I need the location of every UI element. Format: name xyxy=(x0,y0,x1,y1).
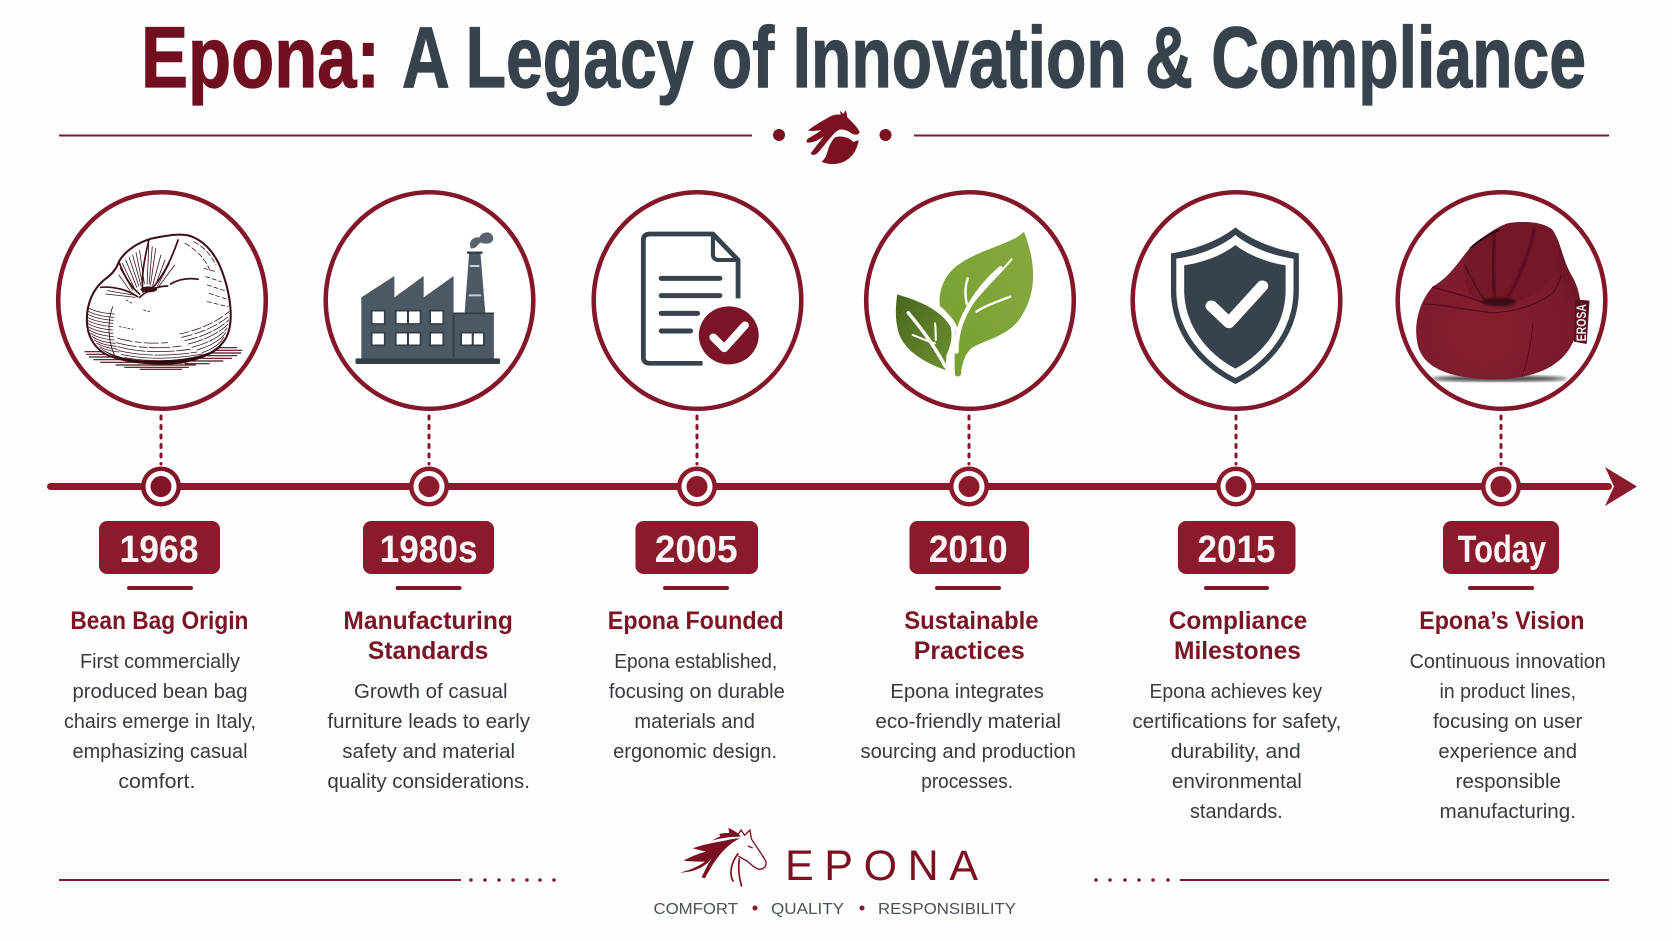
description: standards. xyxy=(1190,800,1283,823)
description xyxy=(609,650,785,763)
description: comfort. xyxy=(118,770,195,793)
connector xyxy=(1234,416,1238,464)
description: environmental xyxy=(1172,770,1302,793)
description: certifications for safety, xyxy=(1132,710,1341,733)
heading: Sustainable xyxy=(904,607,1039,635)
heading xyxy=(904,607,1039,665)
description: Epona established, xyxy=(614,650,777,673)
underline xyxy=(935,586,1001,590)
icon: green leaves xyxy=(866,192,1074,409)
milestone 1980s xyxy=(326,192,533,793)
icon: modern maroon bean bag xyxy=(1398,192,1605,409)
heading: Manufacturing xyxy=(343,607,513,635)
footer left rule xyxy=(59,878,556,882)
milestone Today xyxy=(1398,192,1606,823)
icon: sketched bean bag xyxy=(58,192,266,409)
year badge xyxy=(1443,521,1559,574)
description: materials and xyxy=(634,710,755,733)
description: chairs emerge in Italy, xyxy=(64,710,256,733)
heading: Standards xyxy=(368,637,488,665)
year badge xyxy=(910,521,1029,574)
description: sourcing and production xyxy=(860,740,1076,763)
year badge: 1968 xyxy=(120,529,198,571)
icon: horse head xyxy=(680,828,766,887)
year badge xyxy=(636,521,758,574)
wordmark: EPONA xyxy=(785,842,978,890)
description xyxy=(1410,650,1606,823)
description: experience and xyxy=(1438,740,1577,763)
milestone 2010 xyxy=(860,192,1076,793)
connector xyxy=(696,416,698,464)
node xyxy=(677,466,717,506)
description: quality considerations. xyxy=(327,770,530,793)
description: eco-friendly material xyxy=(875,710,1061,733)
heading: Epona’s Vision xyxy=(1419,607,1584,635)
tagline xyxy=(654,901,1016,918)
footer logo xyxy=(654,828,1016,918)
year badge: 1980s xyxy=(380,529,478,571)
description: First commercially xyxy=(80,650,241,673)
description: in product lines, xyxy=(1440,680,1576,703)
description: manufacturing. xyxy=(1440,800,1576,823)
icon: document with check xyxy=(594,192,801,409)
node xyxy=(1481,466,1521,506)
icon: factory xyxy=(326,192,533,409)
description: processes. xyxy=(921,770,1013,793)
description: Growth of casual xyxy=(354,680,508,703)
heading: Compliance xyxy=(1169,607,1307,635)
description: Epona integrates xyxy=(890,680,1044,703)
heading: Milestones xyxy=(1174,637,1301,665)
underline xyxy=(1204,586,1269,590)
underline xyxy=(663,586,729,590)
year badge: Today xyxy=(1458,529,1546,571)
underline xyxy=(1468,586,1534,590)
description: ergonomic design. xyxy=(613,740,777,763)
description xyxy=(1132,680,1341,823)
year badge: 2015 xyxy=(1198,529,1276,571)
description: focusing on durable xyxy=(609,680,785,703)
icon: shield with check xyxy=(1133,192,1340,409)
year badge: 2010 xyxy=(929,529,1008,571)
heading: Epona Founded xyxy=(608,607,784,635)
description: emphasizing casual xyxy=(72,740,248,763)
underline xyxy=(127,586,193,590)
connector xyxy=(1500,416,1502,464)
milestone 2005 xyxy=(594,192,801,763)
timeline arrow xyxy=(47,467,1637,506)
underline xyxy=(396,586,462,590)
description xyxy=(64,650,256,793)
description: Epona achieves key xyxy=(1150,680,1323,703)
milestone 1968 xyxy=(58,192,266,793)
node xyxy=(949,466,989,506)
description: furniture leads to early xyxy=(327,710,531,733)
description xyxy=(327,680,531,793)
connector xyxy=(968,416,970,464)
description xyxy=(860,680,1076,793)
icon: modern maroon bean bag: EROSA xyxy=(1574,304,1589,341)
description: durability, and xyxy=(1171,740,1301,763)
footer right rule xyxy=(1094,878,1609,882)
milestone 2015 xyxy=(1132,192,1341,823)
description: responsible xyxy=(1456,770,1561,793)
header divider with horse emblem xyxy=(59,110,1609,164)
node xyxy=(141,466,181,506)
description: Continuous innovation xyxy=(1410,650,1606,673)
tagline: QUALITY xyxy=(771,901,844,918)
heading xyxy=(1169,607,1307,665)
year badge xyxy=(99,521,220,574)
node xyxy=(409,466,449,506)
year badge xyxy=(1178,521,1296,574)
title: Epona: xyxy=(141,10,380,106)
node xyxy=(1216,466,1256,506)
heading xyxy=(343,607,513,665)
heading: Bean Bag Origin xyxy=(70,607,248,635)
description: focusing on user xyxy=(1433,710,1582,733)
description: produced bean bag xyxy=(72,680,248,703)
tagline: COMFORT xyxy=(654,901,738,918)
year badge xyxy=(363,521,494,574)
connector xyxy=(160,416,162,464)
year badge: 2005 xyxy=(655,529,738,571)
tagline: RESPONSIBILITY xyxy=(878,901,1016,918)
connector xyxy=(428,416,430,464)
heading: Practices xyxy=(914,637,1025,665)
description: safety and material xyxy=(342,740,515,763)
